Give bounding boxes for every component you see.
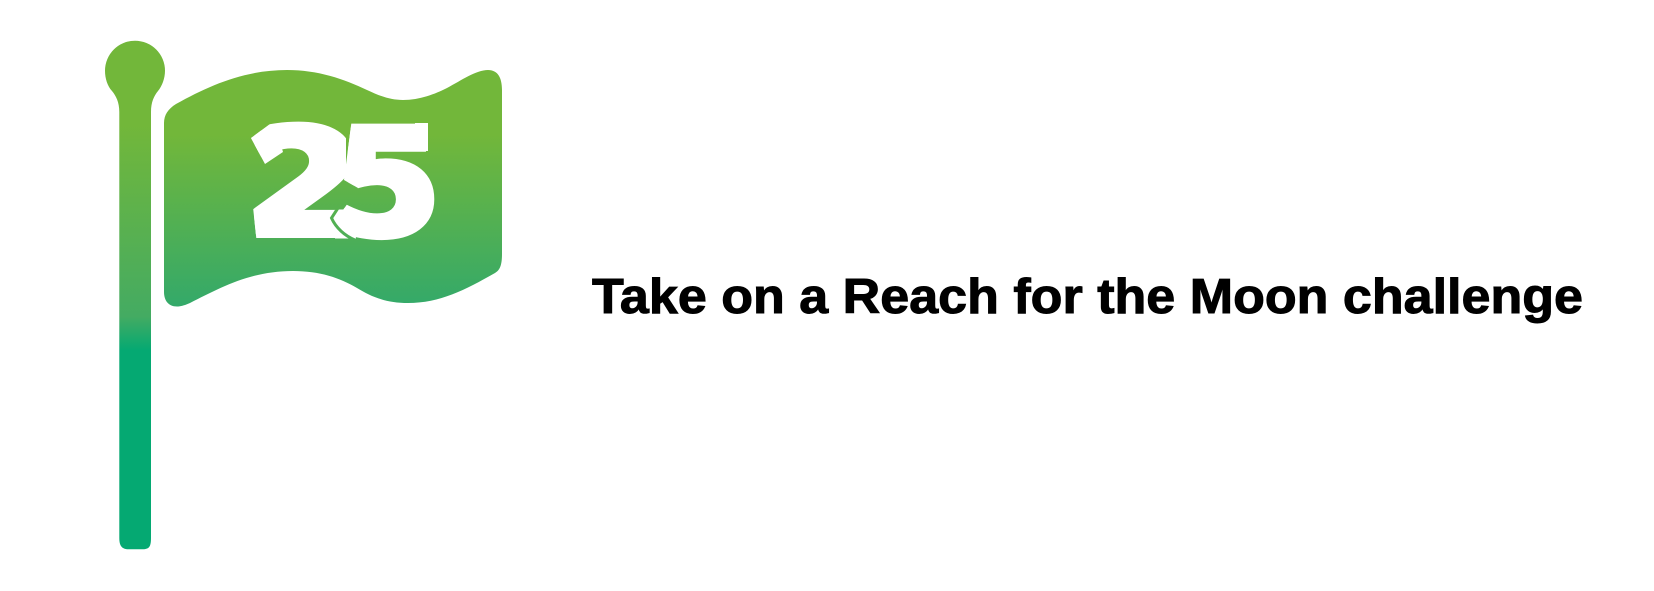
digit 5: 5: [331, 99, 441, 269]
digit 2: 2: [240, 99, 364, 269]
icon: flag with number 25: [105, 41, 502, 549]
flag pole: [105, 41, 165, 549]
number 25: [251, 122, 434, 240]
flag banner: [164, 70, 502, 306]
infographic canvas: [105, 40, 1582, 550]
title: Take on a Reach for the Moon challenge: [592, 270, 1583, 324]
